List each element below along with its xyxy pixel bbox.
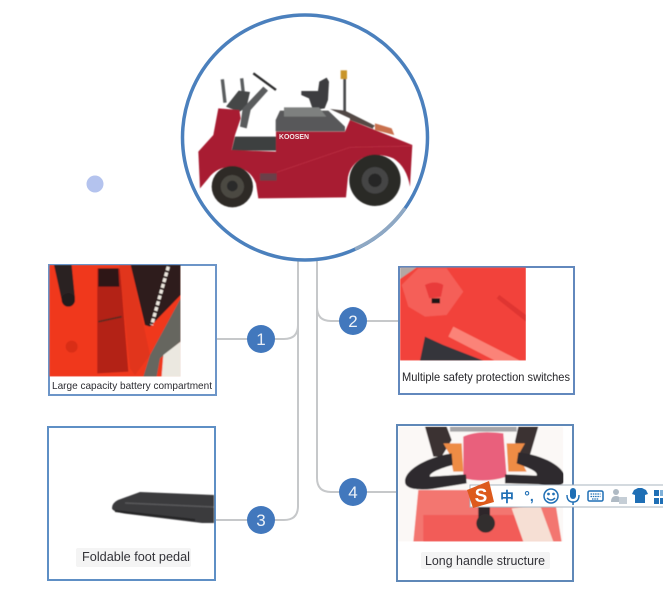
photo: handle [398, 427, 565, 542]
number badge 2: 2 [348, 312, 358, 331]
number badge 1 [247, 325, 275, 353]
number badge 4: 4 [348, 483, 358, 502]
panel 4: long handle: Long handle structure [425, 554, 545, 568]
photo: foot pedal [112, 492, 214, 523]
photo: emergency stop switch [400, 267, 526, 361]
decorative blue dot [86, 176, 104, 192]
number badge 3: 3 [256, 511, 266, 530]
number badge 2 [339, 307, 367, 335]
panel 3: foot pedal [48, 427, 215, 580]
connector lines [216, 260, 398, 520]
number badge 4 [339, 478, 367, 506]
panel 3: foot pedal: Foldable foot pedal [82, 550, 190, 564]
caption [76, 548, 191, 567]
icon: user settings [611, 489, 627, 504]
main circle with tow tractor [182, 15, 428, 260]
icon: shirt [632, 488, 648, 503]
panel 2: safety switches [399, 267, 574, 394]
circle ring [182, 15, 428, 260]
caption [421, 552, 550, 569]
brand label: KOOSEN [279, 132, 309, 141]
icon: smiley [544, 489, 558, 503]
icon: microphone [567, 488, 579, 505]
input method toolbar [467, 481, 663, 508]
caption: Large capacity battery compartment [52, 380, 212, 392]
icon: keyboard [588, 491, 603, 501]
panel 1: battery compartment [49, 265, 216, 395]
number badge 1: 1 [256, 330, 266, 349]
number badge 3 [247, 506, 275, 534]
icon: S logo: S [475, 486, 487, 507]
panel 4: long handle [397, 425, 573, 581]
photo: battery compartment [49, 265, 181, 377]
icon: S logo [467, 481, 494, 508]
chinese mode glyph: 中 [500, 489, 514, 505]
tow tractor [198, 70, 412, 207]
icon: grid [654, 490, 663, 504]
punctuation glyph: °, [524, 488, 534, 504]
caption: Multiple safety protection switches [402, 370, 570, 384]
